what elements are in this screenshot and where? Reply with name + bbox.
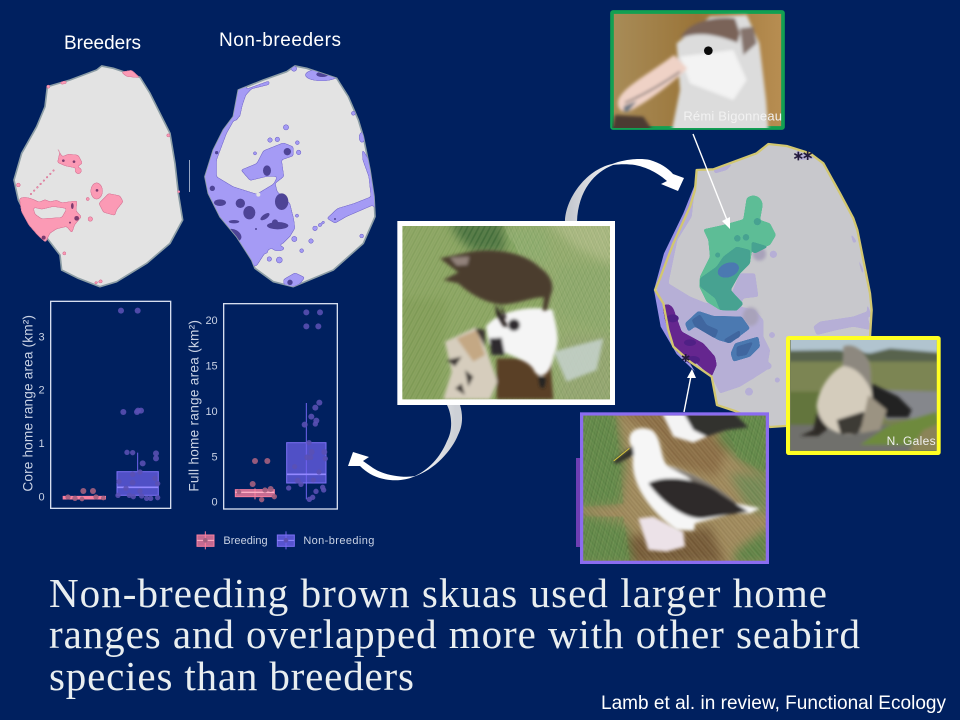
- title: [49, 570, 860, 699]
- legend: breeding key: Breeding: [223, 535, 268, 547]
- seal photo: seal: [800, 345, 912, 436]
- legend: non-breeding key: [277, 531, 374, 549]
- breeders: dark core spots: [42, 159, 98, 240]
- map: non-breeders home range: [197, 66, 380, 288]
- overlap map: purple yellow-nosed albatross range: [663, 304, 717, 377]
- full chart: y ticks: 20: [205, 315, 218, 327]
- credit: N. Gales: N. Gales: [887, 434, 936, 448]
- divider tick between maps: [189, 160, 190, 192]
- core chart: y ticks: 0: [39, 491, 45, 503]
- photo: fur seal: [787, 337, 940, 453]
- map: species overlap on island: [654, 144, 873, 427]
- full chart: y ticks: [205, 315, 218, 509]
- full chart: y ticks: 5: [212, 451, 218, 463]
- core chart: y ticks: 3: [39, 332, 45, 344]
- thin arrow: to yellow-nosed albatross range: [684, 369, 696, 412]
- chart: core home range area: [20, 301, 171, 508]
- breeders: pink range patches: [16, 70, 180, 284]
- skua photo: white chick: [486, 308, 558, 388]
- skua photo: brown skua: [440, 250, 552, 327]
- core chart: breeding box: [63, 488, 106, 501]
- photo: skua on chick: [397, 221, 615, 405]
- title: Non-breeding brown skuas used larger home: [49, 570, 827, 616]
- curved arrow: map to skua photo: [565, 159, 684, 222]
- legend: breeding key: [197, 531, 268, 549]
- non-breeders: home range areas: [197, 66, 380, 288]
- albatross photo: chick: [638, 517, 685, 552]
- albatross photo: main bird: [613, 428, 760, 531]
- full chart: y ticks: 15: [205, 361, 218, 373]
- title: species than breeders: [49, 653, 414, 699]
- skua photo: grass background: [400, 222, 613, 402]
- non-breeders: dark core range: [210, 72, 336, 285]
- core chart: y axis title: Core home range area (km²): [20, 315, 35, 492]
- photo: yellow-nosed albatross: [577, 410, 770, 563]
- credit: Rémi Bigonneau: Rémi Bigonneau: [683, 109, 782, 124]
- thin arrow: to wandering albatross range: [693, 134, 730, 229]
- full chart: y ticks: 0: [212, 497, 218, 509]
- overlap map: yellow coastline: [655, 144, 872, 427]
- full chart: breeding box: [235, 458, 277, 502]
- chick photo: bird: [612, 15, 768, 131]
- photo: wandering albatross chick: [612, 12, 783, 131]
- full chart: y axis title: Full home range area (km²): [187, 320, 202, 492]
- overlap map: purple fringe: [654, 180, 702, 372]
- overlap map: colony stars: [682, 151, 812, 362]
- full chart: frame: [224, 304, 337, 509]
- core chart: frame: [51, 301, 171, 508]
- overlap map: blue ranges: [685, 260, 760, 362]
- photo frame accent behind albatross: [576, 458, 581, 547]
- heading: Breeders: Breeders: [64, 33, 141, 54]
- albatross photo: second bird: [662, 412, 748, 443]
- core chart: y ticks: 2: [39, 385, 45, 397]
- title: ranges and overlapped more with other seabird: [49, 611, 860, 657]
- core chart: non-breeding box: [115, 308, 160, 501]
- overlap map: green wandering albatross range: [699, 196, 776, 311]
- overlap map: light purple range: [657, 151, 872, 396]
- map: breeders home range: [14, 66, 183, 287]
- overlap map: teal overlap: [700, 218, 768, 311]
- full chart: y ticks: 10: [205, 406, 218, 418]
- core chart: y ticks: 1: [39, 438, 45, 450]
- legend: non-breeding key: Non-breeding: [303, 535, 374, 547]
- seal photo: landscape: [787, 337, 940, 453]
- chart legend: [197, 531, 374, 549]
- heading: Non-breeders: Non-breeders: [219, 30, 341, 51]
- core chart: y ticks: [39, 332, 45, 503]
- full chart: non-breeding box: [286, 309, 328, 502]
- albatross photo: nests and grass: [583, 416, 766, 561]
- overlap map: darker blue cores: [692, 314, 753, 357]
- citation: Lamb et al. in review, Functional Ecology: [601, 693, 946, 714]
- chart: full home range area: [187, 304, 337, 509]
- skua photo: carcass and nest: [443, 327, 603, 399]
- curved arrow: skua photo to chart: [348, 405, 462, 480]
- overlap map: island base: [655, 144, 873, 427]
- overlap map: gray patches: [743, 247, 766, 326]
